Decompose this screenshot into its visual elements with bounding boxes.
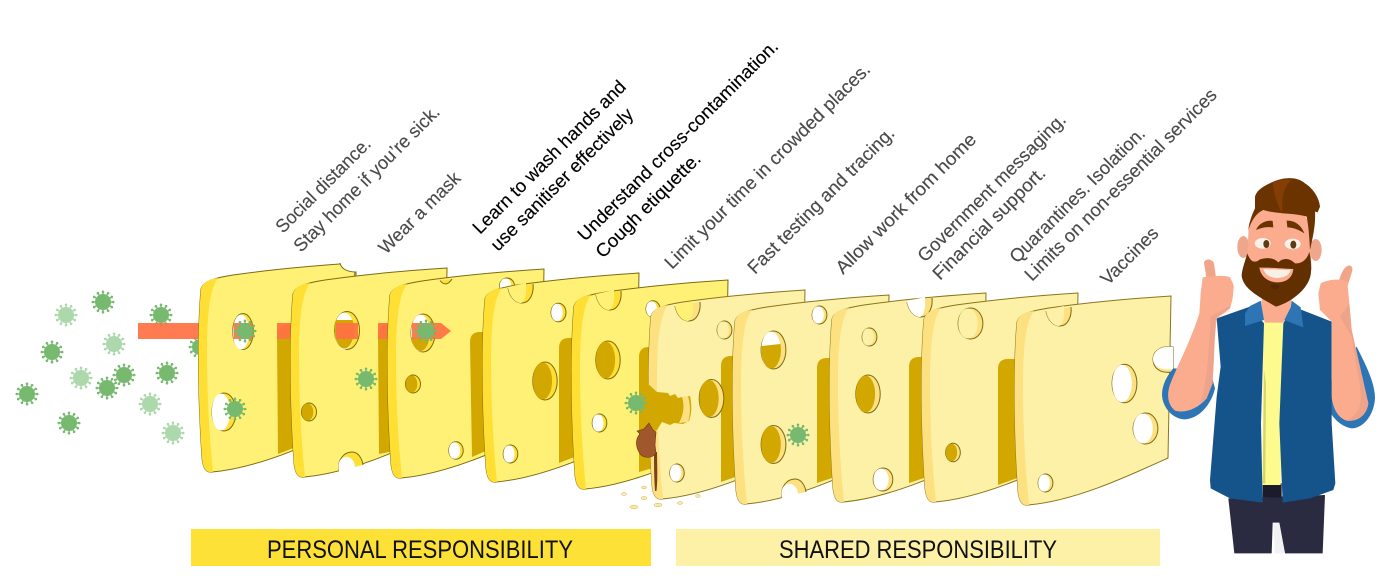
slice 3: wash hands	[388, 269, 544, 478]
icon: mouse nibbling the cheese	[636, 423, 657, 491]
banner: personal responsibility	[191, 529, 651, 566]
slice 8: government messaging	[830, 293, 986, 502]
cheese slices: shared responsibility layers	[645, 290, 1173, 505]
jacket	[1210, 307, 1335, 503]
cheese crumbs	[622, 486, 700, 509]
collar	[1245, 301, 1303, 327]
t-shirt	[1262, 322, 1283, 485]
viruses stopped on the slices	[225, 321, 808, 445]
slice 9: quarantines and isolation	[922, 293, 1078, 502]
label: quarantines: Limits on non-essential services	[1020, 84, 1221, 285]
slice 6: fast testing, with mouse bite	[645, 290, 805, 499]
arrow: tail entering first slice	[138, 323, 202, 339]
label: work from home: Allow work from home	[831, 129, 980, 278]
slice 1: social distance	[198, 262, 358, 472]
beard	[1242, 252, 1311, 307]
slice 2: wear a mask	[290, 268, 447, 477]
virus cloud approaching the barriers	[17, 292, 210, 443]
eyebrows	[1256, 221, 1304, 233]
label: social distance: Social distance.	[271, 133, 375, 237]
label: quarantines: Quarantines. Isolation.	[1005, 123, 1149, 267]
cheese slices: personal responsibility layers	[198, 262, 728, 489]
neck	[1262, 298, 1292, 323]
slice 4: cross-contamination	[482, 273, 639, 482]
character: bearded man giving thumbs up	[1162, 178, 1375, 553]
label: vaccines: Vaccines	[1096, 222, 1162, 289]
banner: shared responsibility	[676, 529, 1160, 566]
ears	[1237, 236, 1322, 261]
label: cross-contamination: Cough etiquette.	[591, 148, 705, 262]
trousers	[1228, 483, 1325, 553]
hair	[1248, 178, 1320, 250]
face	[1247, 208, 1311, 270]
slice 7: allow work from home	[732, 295, 889, 504]
label: crowded places: Limit your time in crowded places.	[660, 59, 874, 273]
label: cross-contamination: Understand cross-contamination.	[573, 36, 782, 245]
slice labels	[271, 36, 1221, 289]
label: wash hands: Learn to wash hands and	[468, 76, 630, 238]
sleeves	[1162, 347, 1375, 428]
label: wear a mask: Wear a mask	[374, 167, 465, 258]
label: social distance: Stay home if you’re sick.	[289, 101, 444, 256]
banner: shared responsibility: SHARED RESPONSIBILITY	[779, 536, 1057, 564]
left arm with thumb up	[1168, 259, 1234, 412]
label: government messaging: Government messaging.	[913, 109, 1070, 266]
label: government messaging: Financial support.	[928, 162, 1050, 284]
slice 10: vaccines	[1014, 296, 1173, 505]
eyes	[1255, 238, 1301, 249]
right arm with thumb up	[1318, 265, 1368, 421]
label: testing and tracing: Fast testing and tracing.	[743, 122, 899, 278]
mouth	[1259, 268, 1293, 289]
slice 5: limit crowded places	[572, 280, 728, 489]
label: wash hands: use sanitiser effectively	[486, 103, 638, 255]
banner: personal responsibility: PERSONAL RESPONSIBILITY	[267, 536, 573, 564]
